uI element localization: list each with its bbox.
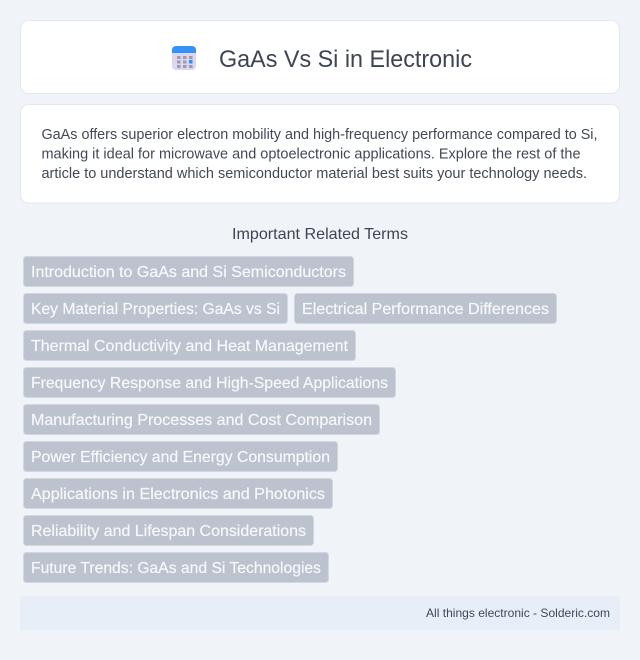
tag: electrical performance: Electrical Performance Differences	[302, 301, 549, 318]
tag: introduction	[24, 256, 354, 286]
footer: All things electronic - Solderic.com	[426, 606, 610, 620]
tag: manufacturing: Manufacturing Processes and Cost Comparison	[31, 412, 372, 429]
tag list	[24, 256, 556, 582]
tag: power efficiency	[24, 442, 338, 472]
icon: calendar	[172, 46, 196, 70]
tag: key material properties	[24, 294, 288, 324]
panel: header	[20, 20, 620, 94]
text block: introduction: GaAs offers superior electron mobility and high-frequency performance compared to Si,	[42, 127, 598, 143]
panel: introduction	[20, 104, 620, 203]
tag: power efficiency: Power Efficiency and Energy Consumption	[31, 449, 330, 466]
tag: applications: Applications in Electronics and Photonics	[31, 486, 325, 503]
tag: introduction: Introduction to GaAs and Si Semiconductors	[31, 264, 346, 281]
title: GaAs Vs Si in Electronic	[219, 46, 472, 73]
tag: applications	[24, 478, 332, 508]
tag: thermal conductivity: Thermal Conductivity and Heat Management	[31, 338, 349, 355]
tag: reliability: Reliability and Lifespan Considerations	[31, 523, 306, 540]
tag: reliability	[24, 516, 314, 546]
tag: frequency response: Frequency Response and High-Speed Applications	[31, 375, 388, 392]
tag: frequency response	[24, 368, 396, 398]
tag: manufacturing	[24, 404, 380, 434]
footer	[20, 596, 620, 630]
tag: future trends	[24, 552, 328, 582]
text block: introduction: article to understand which semiconductor material best suits your technology needs.	[42, 166, 587, 182]
tag: electrical performance	[294, 294, 556, 324]
tag: thermal conductivity	[24, 330, 356, 360]
tag: future trends: Future Trends: GaAs and Si Technologies	[31, 560, 321, 577]
text block: introduction: making it ideal for microwave and optoelectronic applications. Explore the rest of the	[42, 146, 580, 162]
text block: introduction	[42, 127, 598, 182]
tag: key material properties: Key Material Properties: GaAs vs Si	[31, 301, 280, 318]
heading: important related terms: Important Related Terms	[232, 226, 408, 243]
